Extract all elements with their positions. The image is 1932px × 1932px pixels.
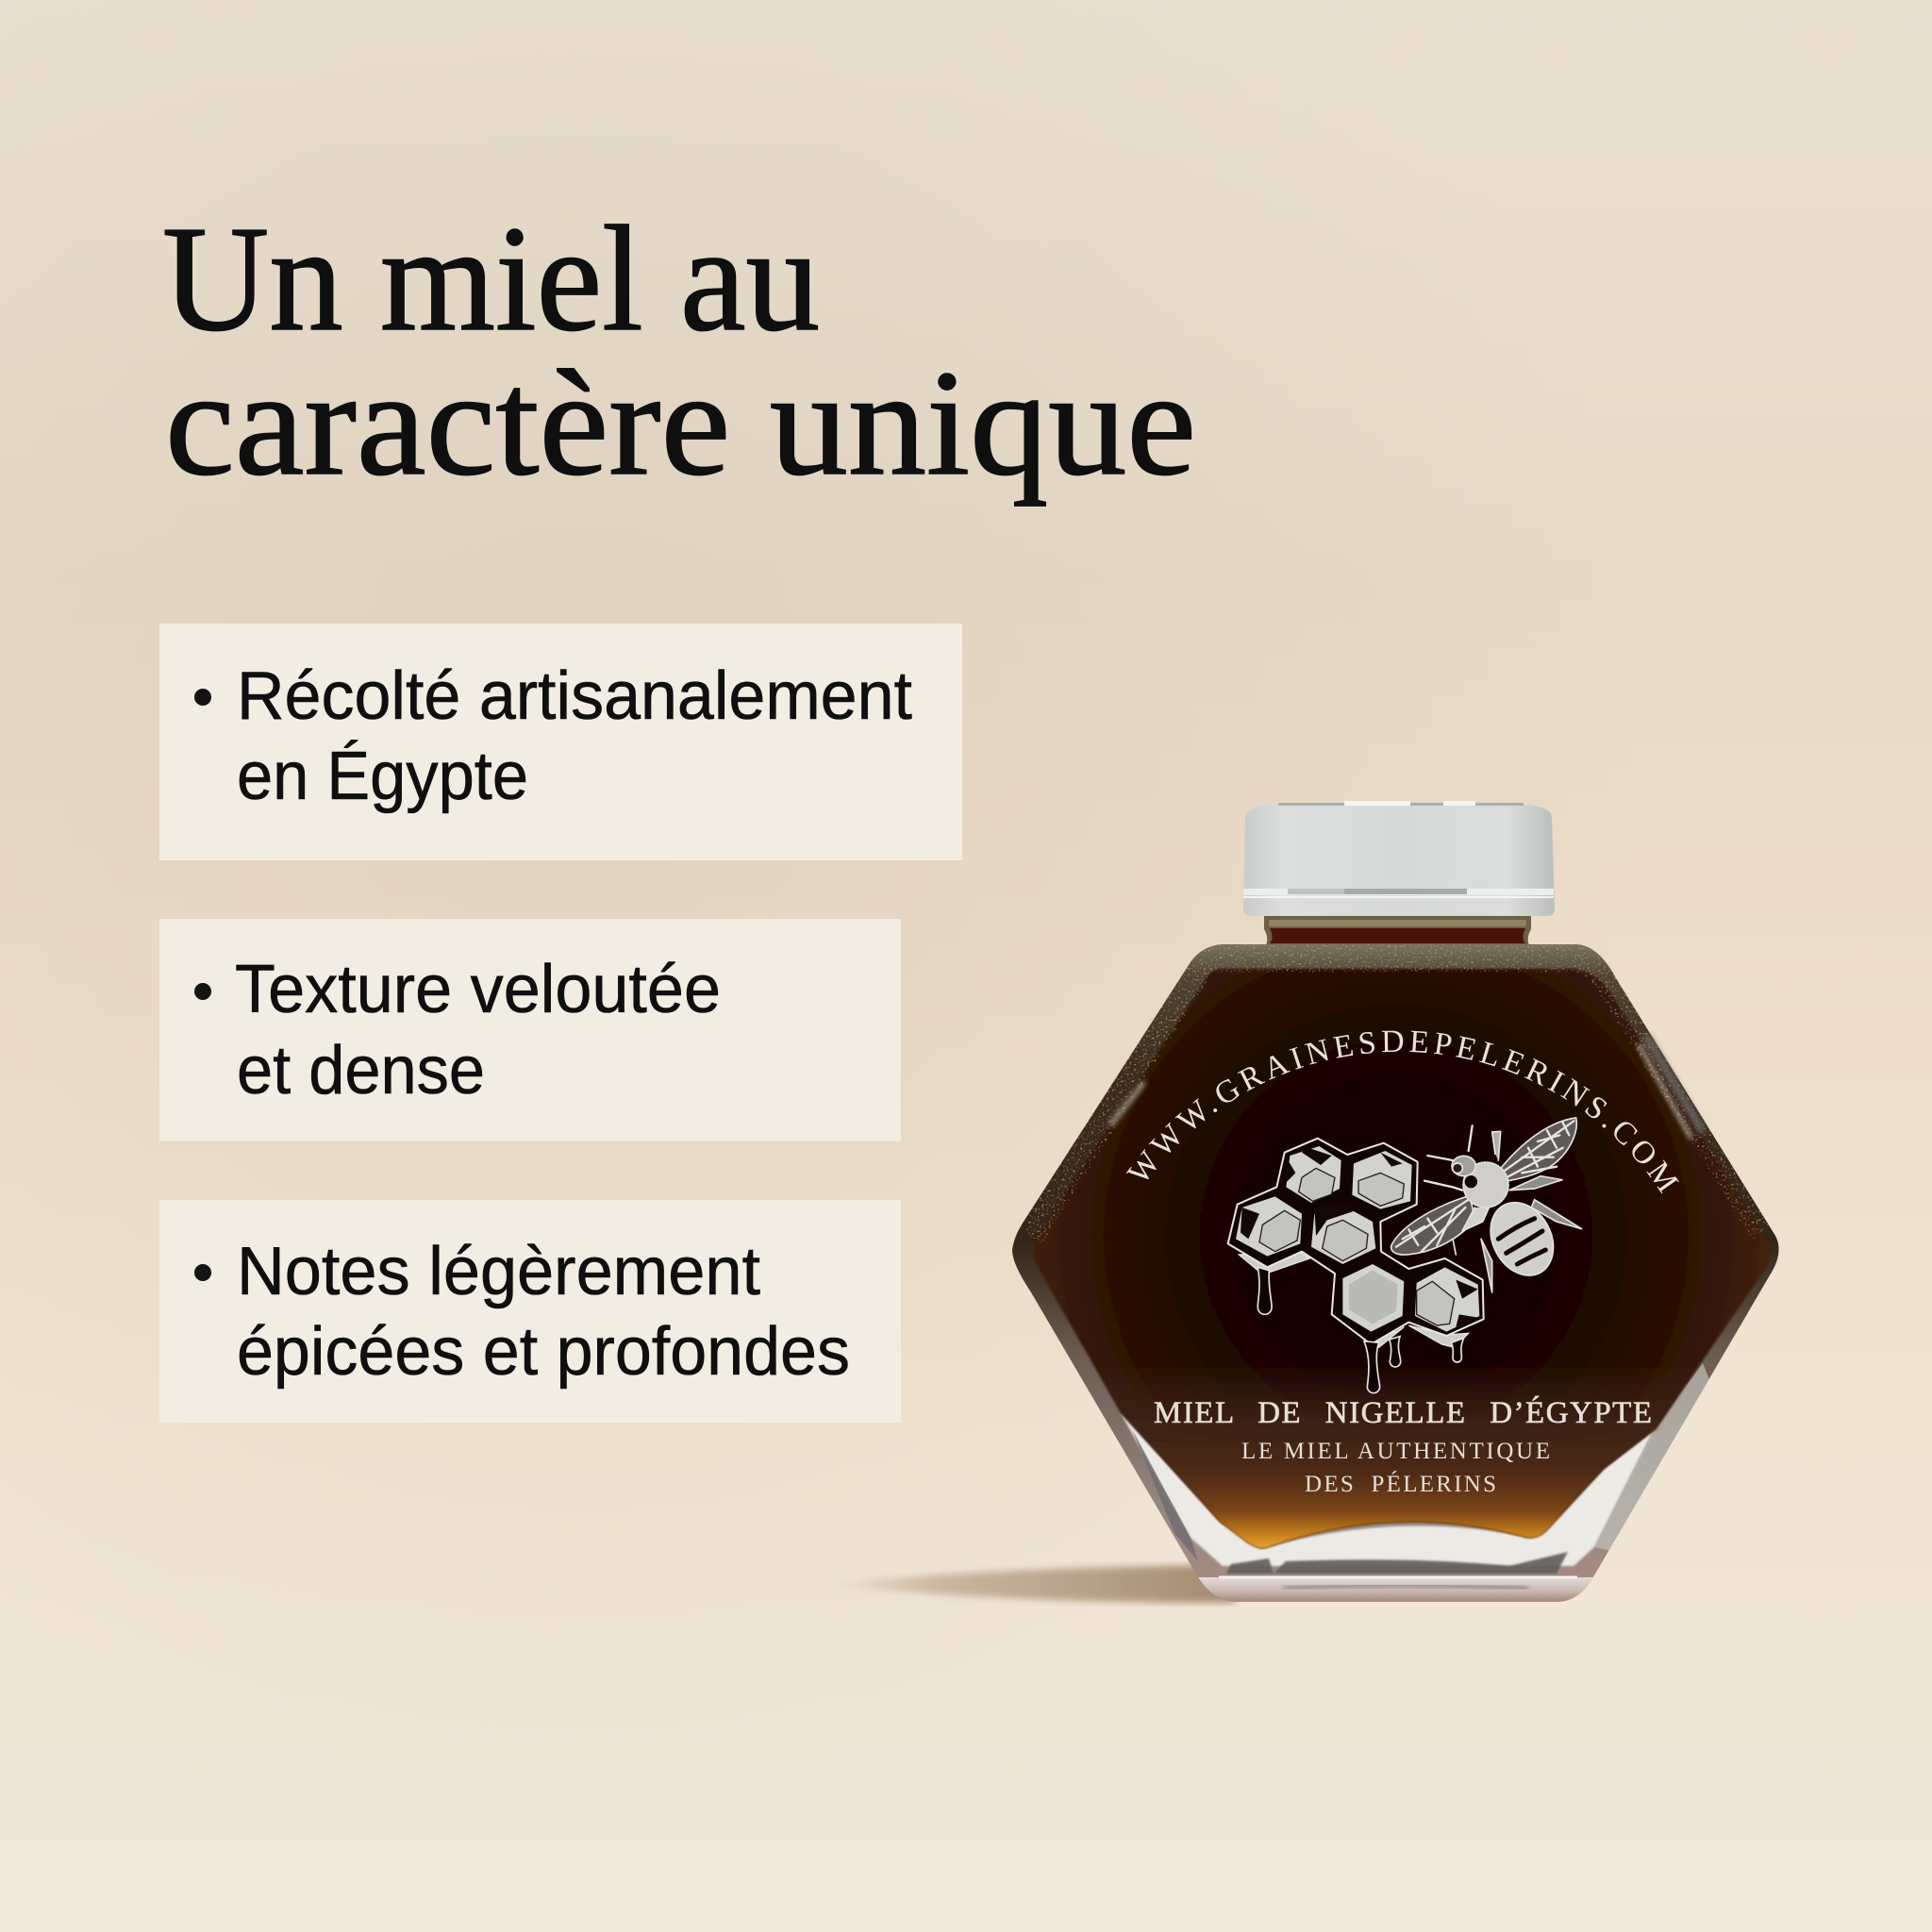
jar label text [1154, 1395, 1652, 1497]
panel: récolté artisanalement [159, 624, 962, 860]
jar lid [1243, 801, 1555, 916]
jar label text: MIEL DE NIGELLE D’ÉGYPTE [1154, 1395, 1652, 1430]
curved label text: WWW.GRAINESDEPELERINS.COM [1126, 1030, 1679, 1194]
title: Un miel au [162, 194, 820, 362]
jar label text: DES PÉLERINS [1305, 1471, 1496, 1497]
icon: honeycomb [1228, 1139, 1484, 1393]
jar glass body [1012, 944, 1779, 1602]
shoulder highlights [1110, 951, 1703, 1139]
honey jar [1012, 801, 1779, 1602]
panel: texture veloutée: Texture veloutée [235, 952, 721, 1027]
panel: récolté artisanalement: en Égypte [237, 739, 528, 814]
panel: texture veloutée: et dense [237, 1033, 485, 1108]
panel: notes légèrement épicées: Notes légèrement [237, 1234, 760, 1309]
shoulder speckle [1030, 958, 1764, 1236]
jar base [1189, 1552, 1604, 1604]
title: caractère unique [165, 339, 1196, 507]
jar neck [1264, 911, 1531, 947]
lower glass [1121, 1363, 1712, 1566]
panel: texture veloutée [159, 919, 901, 1141]
title [162, 194, 1196, 507]
panel: notes légèrement épicées [159, 1200, 901, 1423]
icon: bee [1391, 1118, 1582, 1292]
honey [1033, 969, 1772, 1548]
panel: notes légèrement épicées: épicées et profondes [237, 1314, 850, 1390]
jar shadow [821, 1565, 1236, 1603]
jar label text: LE MIEL AUTHENTIQUE [1241, 1439, 1550, 1464]
panel: récolté artisanalement: Récolté artisanalement [237, 658, 912, 734]
